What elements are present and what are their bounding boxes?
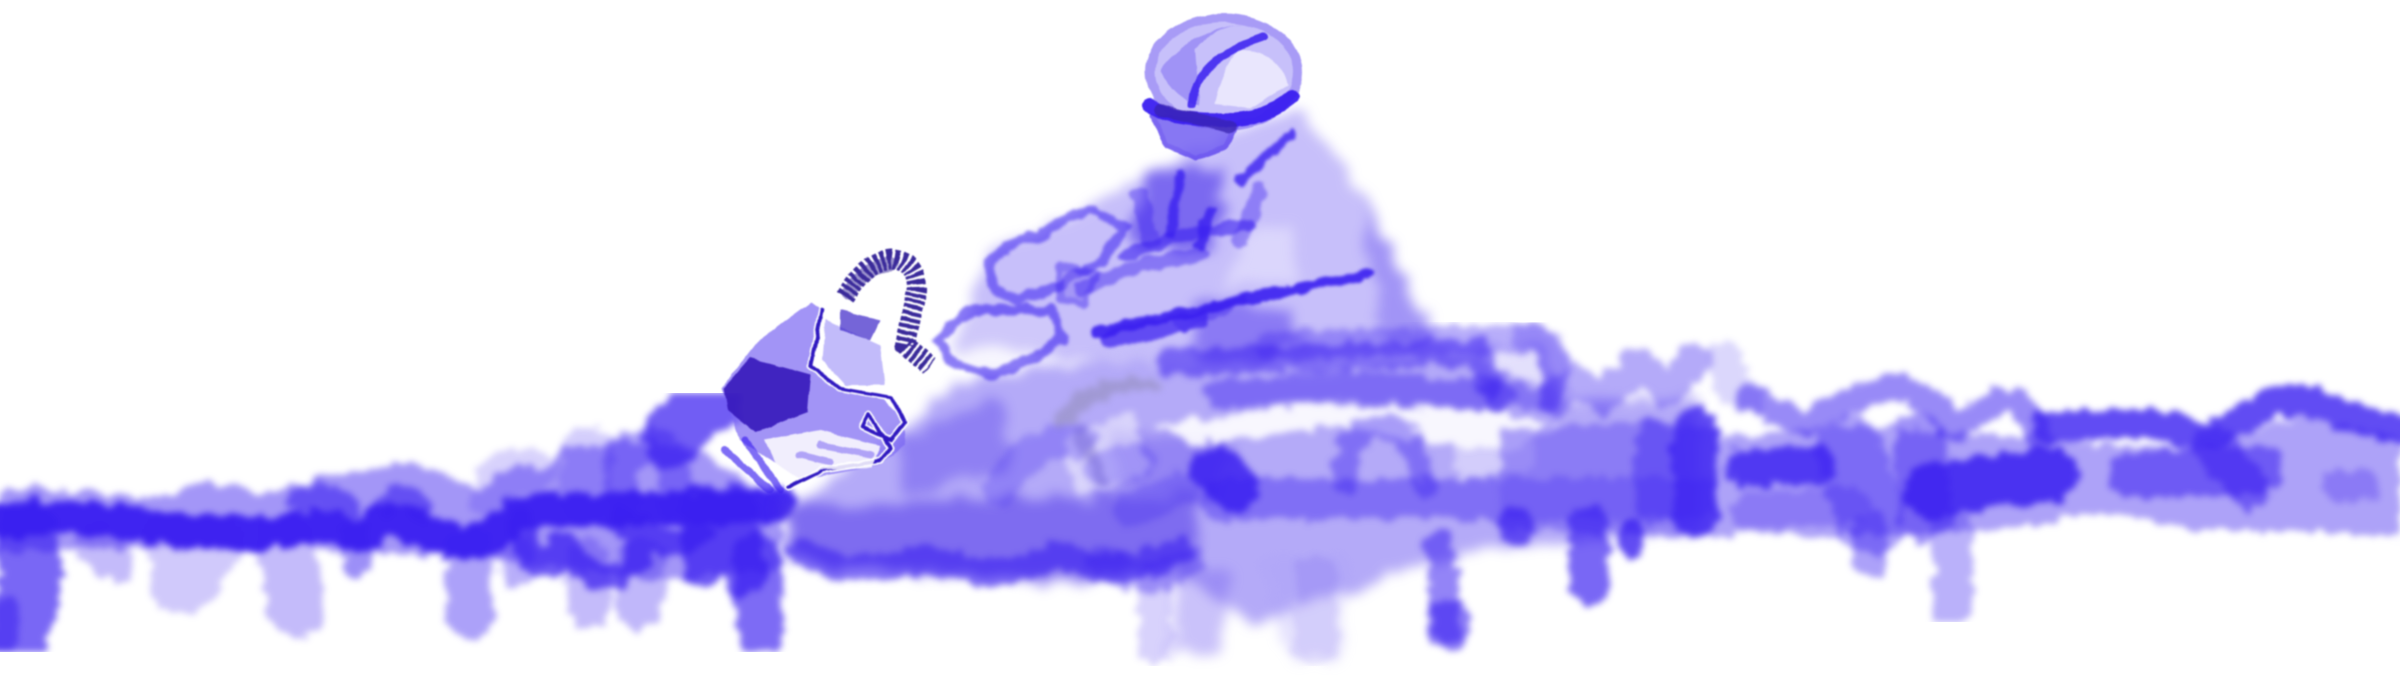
white cloth under the mask [725,430,880,490]
white gaps between bed rails [1060,345,1560,500]
centre drips [1155,545,1448,650]
patient torso and bed wash [780,345,1700,660]
left watercolour band [0,405,780,640]
arch on the bed rail [1345,428,1425,485]
bed frame and rails [800,338,1700,650]
dark blob on the rail [1215,470,1235,490]
left drips [6,530,760,640]
right watercolour band [1500,337,2400,608]
helmet [1150,18,1298,126]
breathing tube [845,259,930,366]
right band: dark blocks [1655,430,2365,520]
medic figure: body wash [950,108,1445,370]
left band: dark main stroke [0,505,780,543]
oxygen mask and patient's face [722,302,905,487]
right band: light squiggle above [1500,360,1695,410]
medic figure: brushed arms and hands [937,135,1367,375]
left band: looping squiggles [520,519,700,578]
right drips [1517,525,1953,608]
left band: loose blobs above the stroke [490,405,715,500]
right band: upper dark stroke [2045,399,2400,437]
medic figure: helmet, goggles and patient line work [722,18,1298,490]
goggles [1150,97,1292,158]
